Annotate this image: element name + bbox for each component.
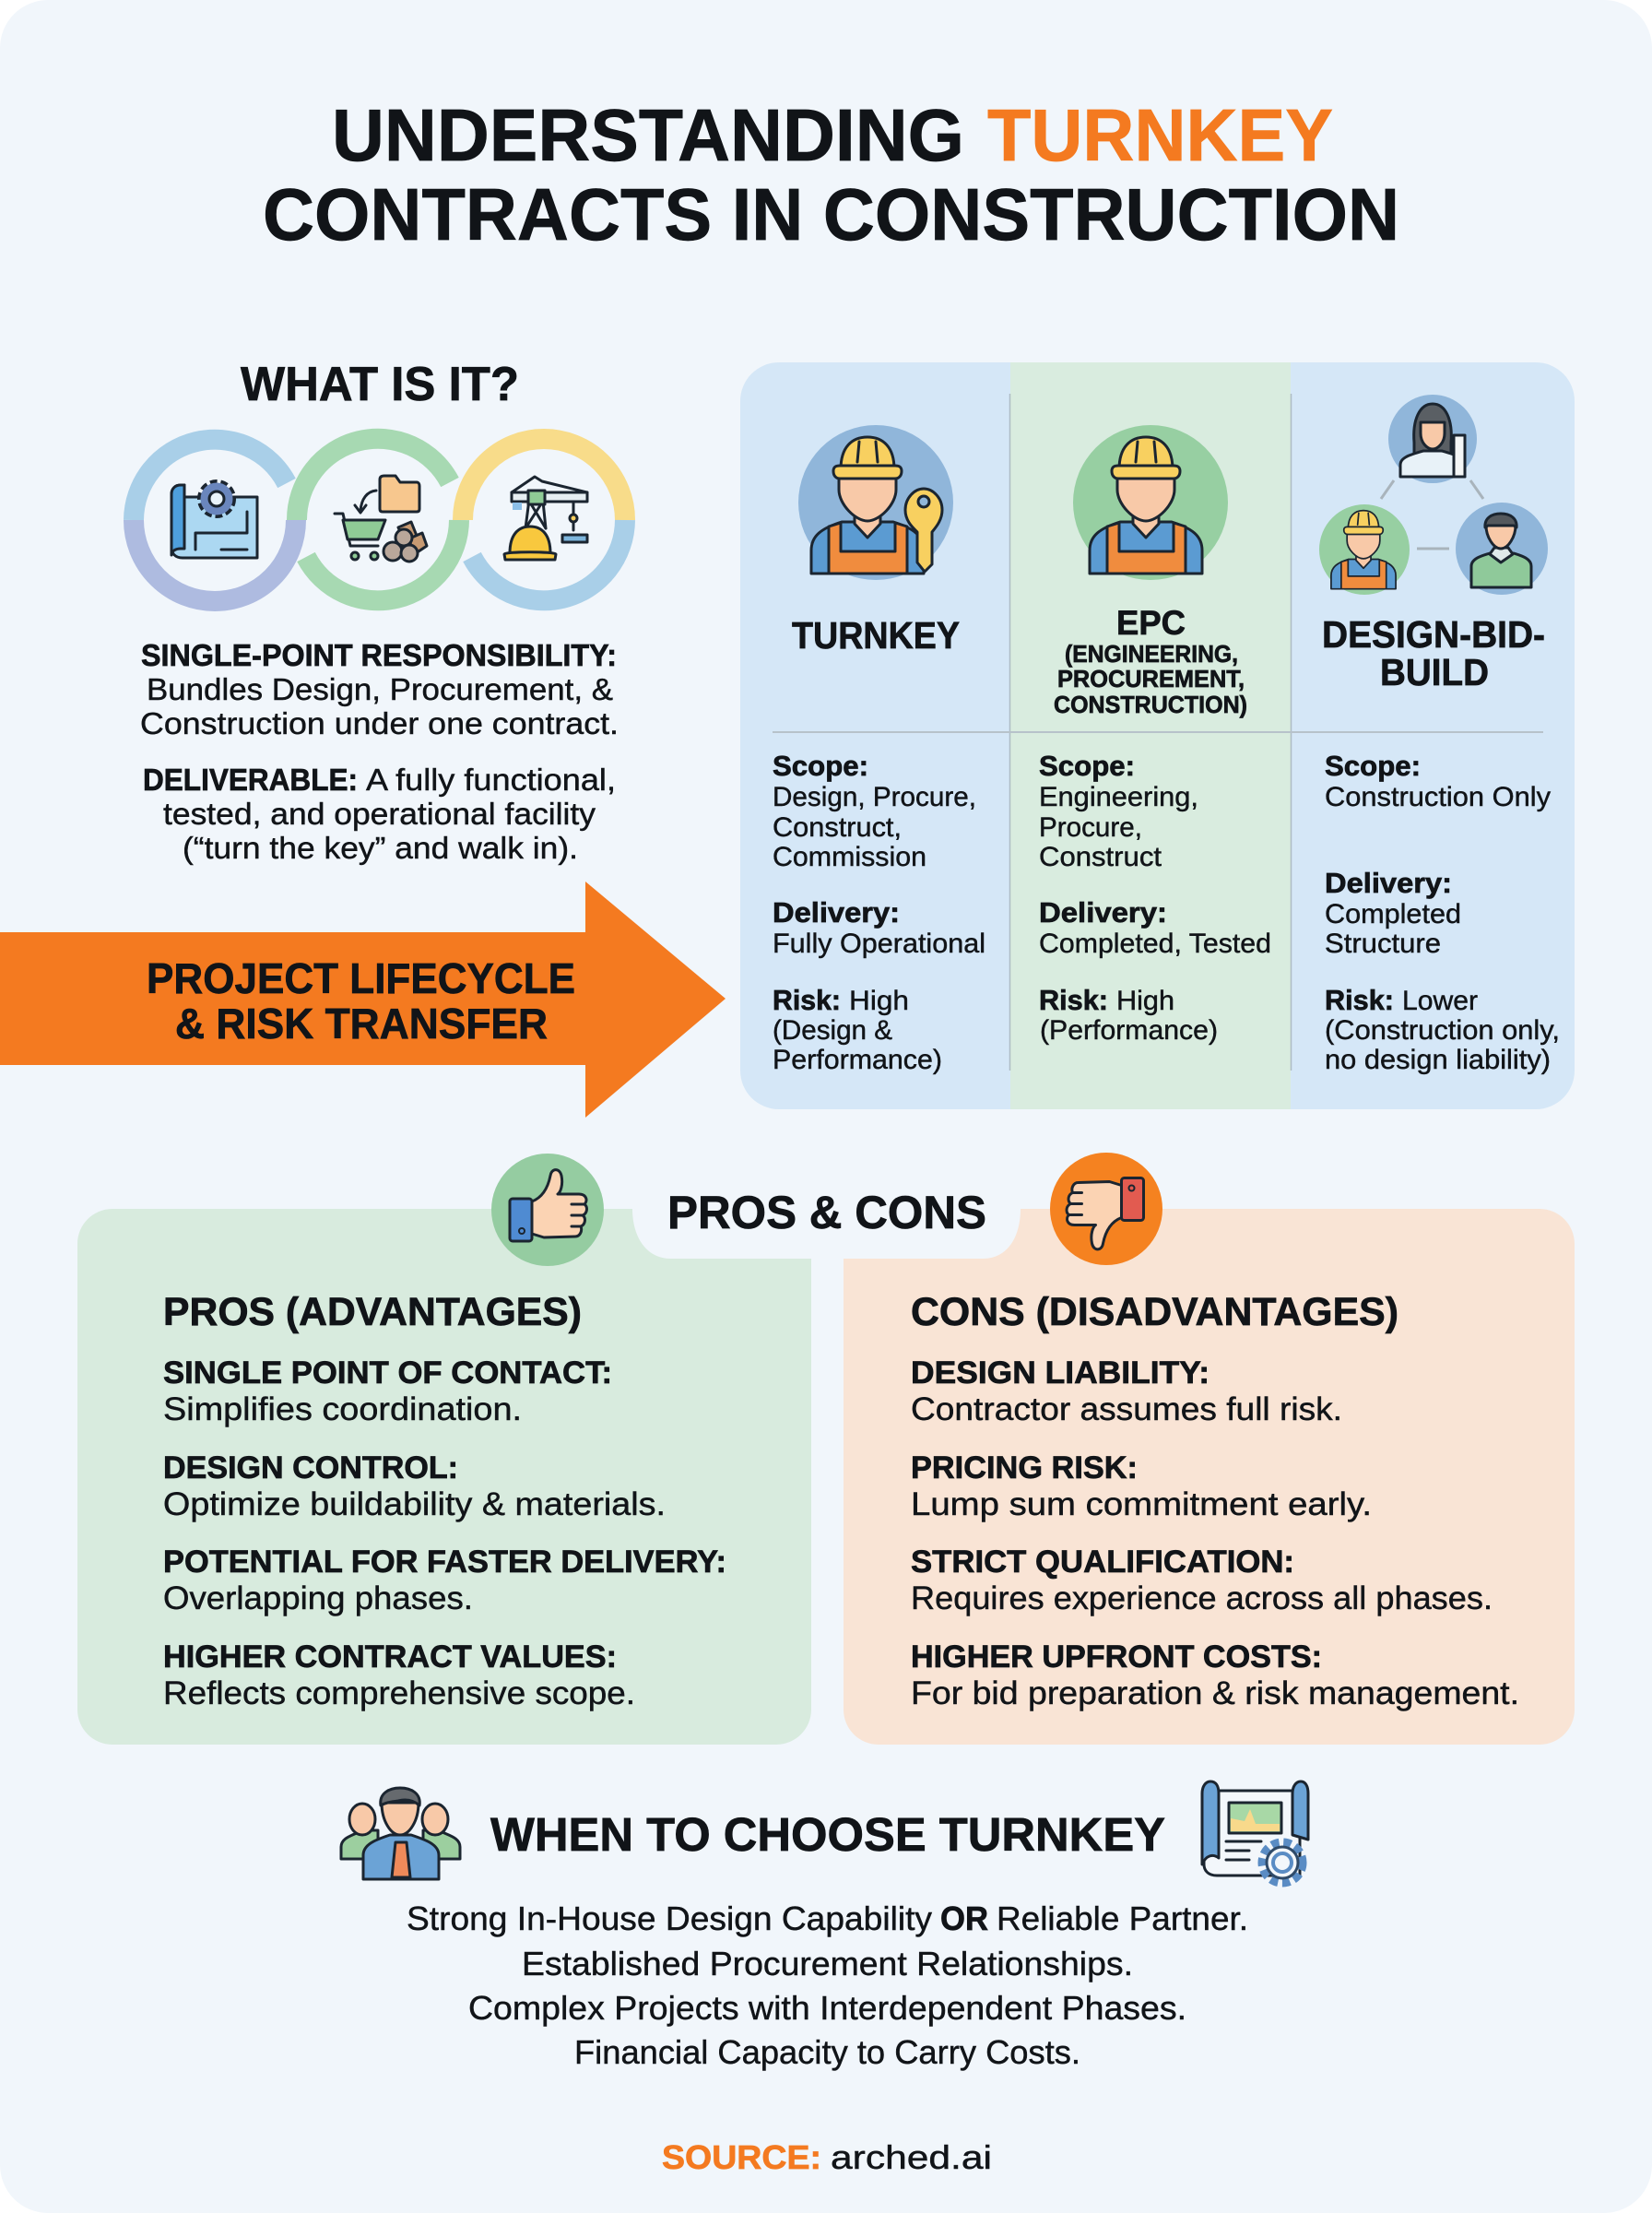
icon: worker with key — [798, 425, 953, 580]
column: epc: High — [1116, 986, 1174, 1016]
column: design-bid-build: (Construction only, — [1325, 1015, 1560, 1046]
column: design-bid-build: Scope: — [1325, 750, 1421, 782]
source credit: SOURCE: — [662, 2138, 821, 2176]
panel: cons: CONS (DISADVANTAGES) — [911, 1290, 1398, 1334]
column: epc: Construct — [1039, 842, 1162, 872]
ring: design — [134, 440, 296, 601]
text block: when to choose list: Strong In-House Design Capability — [407, 1899, 932, 1937]
panel: pros: SINGLE POINT OF CONTACT: — [163, 1355, 612, 1391]
chain of rings — [134, 439, 625, 601]
icon: thumbs down — [1050, 1153, 1162, 1265]
column: turnkey: Design, Procure, — [773, 782, 976, 812]
column: design-bid-build: BUILD — [1380, 651, 1489, 693]
panel: pros: DESIGN CONTROL: — [163, 1450, 458, 1485]
panel: cons: STRICT QUALIFICATION: — [911, 1544, 1294, 1580]
panel: pros: PROS (ADVANTAGES) — [163, 1290, 582, 1334]
column: design-bid-build: Structure — [1325, 929, 1441, 959]
heading: when to choose turnkey: WHEN TO CHOOSE TURNKEY — [490, 1808, 1165, 1861]
column: epc: (ENGINEERING, — [1065, 640, 1238, 668]
panel: pros: Overlapping phases. — [163, 1580, 473, 1616]
column: turnkey: Fully Operational — [773, 929, 985, 959]
column: epc: Procure, — [1039, 812, 1142, 843]
icon: crane and hard hat — [504, 477, 587, 560]
source credit: arched.ai — [831, 2138, 992, 2176]
column: epc: EPC — [1116, 604, 1186, 642]
title: CONTRACTS IN CONSTRUCTION — [263, 173, 1399, 255]
text block: when to choose list: Reliable Partner. — [997, 1899, 1248, 1937]
arrow: project lifecycle and risk transfer: & RISK TRANSFER — [175, 1000, 548, 1047]
ring: construction — [463, 439, 625, 600]
column: epc: Completed, Tested — [1039, 929, 1271, 959]
column: design-bid-build: Risk: — [1325, 984, 1394, 1016]
icon: thumbs up — [491, 1154, 604, 1266]
text block: definition — [140, 638, 619, 865]
column: turnkey: High — [849, 986, 909, 1016]
column: turnkey: Scope: — [773, 750, 868, 782]
column: epc: Engineering, — [1039, 782, 1198, 812]
column: epc — [1039, 425, 1271, 1046]
column: design-bid-build: Construction Only — [1325, 782, 1551, 812]
column: design-bid-build — [1319, 395, 1560, 1075]
column: turnkey: Delivery: — [773, 896, 900, 929]
panel: pros: POTENTIAL FOR FASTER DELIVERY: — [163, 1544, 726, 1580]
icon: worker — [1073, 425, 1228, 580]
column: turnkey: Performance) — [773, 1045, 942, 1075]
text block: definition: DELIVERABLE: — [143, 763, 358, 797]
panel: cons — [844, 1209, 1575, 1745]
column: epc: (Performance) — [1040, 1015, 1218, 1046]
text block: definition: Construction under one contract. — [140, 706, 619, 740]
panel: pros: HIGHER CONTRACT VALUES: — [163, 1639, 617, 1675]
text block: definition: (“turn the key” and walk in). — [183, 831, 578, 865]
text block: when to choose list: OR — [940, 1899, 988, 1937]
panel: pros: Simplifies coordination. — [163, 1391, 522, 1427]
text block: when to choose list: Financial Capacity to Carry Costs. — [574, 2033, 1080, 2071]
panel: cons: PRICING RISK: — [911, 1450, 1138, 1485]
icon: blueprint and gear — [171, 483, 257, 558]
title — [263, 94, 1399, 255]
heading: pros and cons: PROS & CONS — [667, 1187, 986, 1238]
panel: cons: DESIGN LIABILITY: — [911, 1355, 1210, 1391]
column: design-bid-build: Delivery: — [1325, 867, 1452, 899]
column: design-bid-build: DESIGN-BID- — [1322, 613, 1545, 656]
panel: cons: For bid preparation & risk management. — [911, 1675, 1519, 1711]
icon: cart folder and logs — [335, 476, 427, 562]
icon: plan and gear — [1202, 1781, 1308, 1882]
icon: team of people — [341, 1788, 460, 1879]
panel: pros: Optimize buildability & materials. — [163, 1486, 666, 1522]
text block: definition: Bundles Design, Procurement, & — [147, 672, 613, 706]
text block: definition: A fully functional, — [366, 763, 616, 797]
column: turnkey: Risk: — [773, 984, 841, 1016]
arrow: project lifecycle and risk transfer: PROJECT LIFECYCLE — [147, 954, 575, 1002]
panel: cons: Lump sum commitment early. — [911, 1486, 1372, 1522]
source credit — [662, 2138, 992, 2176]
panel: pros — [77, 1209, 811, 1745]
column: turnkey: Commission — [773, 842, 926, 872]
column: design-bid-build: no design liability) — [1325, 1045, 1551, 1075]
icon: three parties — [1319, 395, 1548, 595]
text block: definition: tested, and operational facility — [163, 797, 596, 831]
title: UNDERSTANDING — [332, 94, 964, 176]
column: turnkey: Construct, — [773, 812, 902, 843]
arrow: project lifecycle and risk transfer — [0, 882, 726, 1118]
column: turnkey: TURNKEY — [792, 614, 960, 657]
panel: comparison table — [740, 362, 1575, 1109]
column: epc: Risk: — [1039, 984, 1108, 1016]
panel: pros: Reflects comprehensive scope. — [163, 1675, 635, 1711]
column: epc: Scope: — [1039, 750, 1135, 782]
text block: when to choose list: Complex Projects with Interdependent Phases. — [468, 1989, 1186, 2027]
column: turnkey: (Design & — [773, 1015, 892, 1046]
panel: cons: Contractor assumes full risk. — [911, 1391, 1342, 1427]
title: TURNKEY — [987, 94, 1333, 176]
column: design-bid-build: Completed — [1325, 899, 1461, 929]
column: design-bid-build: Lower — [1402, 986, 1478, 1016]
text block: definition: SINGLE-POINT RESPONSIBILITY: — [141, 638, 617, 672]
column: epc: Delivery: — [1039, 896, 1167, 929]
panel: cons: HIGHER UPFRONT COSTS: — [911, 1639, 1322, 1675]
column: turnkey — [773, 425, 985, 1075]
column: epc: CONSTRUCTION) — [1054, 691, 1247, 718]
panel: cons: Requires experience across all phases. — [911, 1580, 1493, 1616]
text block: when to choose list: Established Procurement Relationships. — [522, 1945, 1133, 1982]
text block: when to choose list — [407, 1899, 1248, 2071]
column: epc: PROCUREMENT, — [1057, 665, 1245, 692]
ring: procurement — [297, 439, 459, 600]
heading: what is it: WHAT IS IT? — [241, 358, 519, 411]
